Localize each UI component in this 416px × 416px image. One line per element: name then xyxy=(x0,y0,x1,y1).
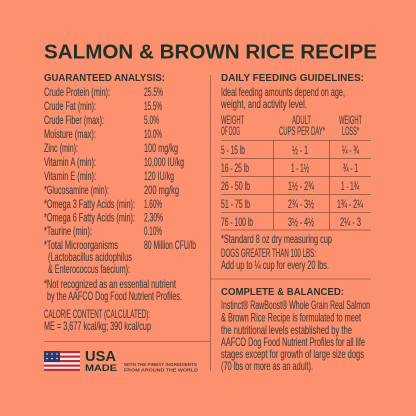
intro text xyxy=(220,86,345,111)
calorie content xyxy=(44,308,151,333)
nutrient values: 15.5% xyxy=(144,100,162,113)
nutrient labels: Zinc (min): xyxy=(44,142,78,155)
usa made badge text: FROM AROUND THE WORLD xyxy=(124,368,198,372)
large dog note xyxy=(221,247,329,272)
heading: complete and balanced: COMPLETE & BALANCED: xyxy=(221,287,344,298)
feeding table: 1 - 1½ xyxy=(291,162,309,175)
nutrient labels: Crude Fiber (max): xyxy=(44,114,104,127)
nutrient values: 100 mg/kg xyxy=(144,142,178,155)
nutrient labels: Moisture (max): xyxy=(44,128,96,141)
intro text: weight, and activity level. xyxy=(220,98,307,111)
footnote xyxy=(44,278,182,303)
nutrient labels: *Total Microorganisms xyxy=(44,239,118,252)
feeding table xyxy=(221,114,371,230)
nutrient labels: Crude Protein (min): xyxy=(44,86,110,99)
nutrient values: 1.60% xyxy=(144,198,162,211)
feeding table: 1¾ - 2¼ xyxy=(337,198,363,211)
heading: guaranteed analysis: GUARANTEED ANALYSIS: xyxy=(44,73,165,84)
nutrient values: 10.0% xyxy=(144,128,162,141)
nutrient labels: Crude Fat (min): xyxy=(44,100,96,113)
feeding table: CUPS PER DAY* xyxy=(279,125,325,138)
nutrient labels: Vitamin A (min): xyxy=(44,156,96,169)
nutrient labels: & Enterococcus faecium): xyxy=(48,263,130,276)
usa made badge text: MADE xyxy=(85,363,117,374)
feeding table: ½ - 1 xyxy=(292,144,308,157)
nutrient values: 5.0% xyxy=(144,114,159,127)
statement text xyxy=(221,299,370,373)
feeding table: ¾ - 1 xyxy=(343,162,358,175)
feeding table: 51 - 75 lb xyxy=(221,198,250,211)
large dog note: Add up to ¼ cup for every 20 lbs. xyxy=(221,259,329,272)
nutrient labels: (Lactobacillus acidophilus xyxy=(48,251,132,264)
nutrient values: 10,000 IU/kg xyxy=(144,156,184,169)
icon: usa flag xyxy=(44,351,80,371)
panel: complete and balanced xyxy=(221,287,370,373)
large dog note: DOGS GREATER THAN 100 LBS: xyxy=(221,247,316,260)
feeding table: 2¾ - 3½ xyxy=(288,198,314,211)
feeding table: 5 - 15 lb xyxy=(221,144,245,157)
nutrient values: 2.30% xyxy=(144,212,163,224)
usa made badge text: WITH THE FINEST INGREDIENTS xyxy=(124,362,197,367)
feeding table: WEIGHT xyxy=(339,114,362,127)
feeding table: 1½ - 2¾ xyxy=(288,180,314,193)
heading: daily feeding guidelines: DAILY FEEDING GUIDELINES: xyxy=(221,73,364,84)
statement text: (70 lbs or more as an adult). xyxy=(221,360,313,373)
usa made badge text xyxy=(85,349,198,374)
table footnote: *Standard 8 oz dry measuring cup xyxy=(221,233,332,246)
feeding table: OF DOG xyxy=(221,125,240,138)
title: SALMON & BROWN RICE RECIPE xyxy=(44,42,377,64)
nutrient values: 80 Million CFU/lb xyxy=(144,239,196,252)
feeding table: 3½ - 4½ xyxy=(288,216,314,229)
nutrient values: 200 mg/kg xyxy=(144,184,179,197)
feeding table: 16 - 25 lb xyxy=(221,162,249,175)
nutrient labels: *Omega 6 Fatty Acids (min): xyxy=(44,212,135,224)
panel: guaranteed analysis xyxy=(44,73,196,333)
feeding table: WEIGHT xyxy=(221,114,244,127)
footnote: *Not recognized as an essential nutrient xyxy=(44,278,176,291)
feeding table: LOSS* xyxy=(342,125,359,138)
feeding table: 1 - 1¾ xyxy=(341,180,359,193)
feeding table: ADULT xyxy=(292,114,311,127)
nutrient values: 120 IU/kg xyxy=(144,170,174,183)
intro text: Ideal feeding amounts depend on age, xyxy=(221,86,345,99)
nutrient labels: *Glucosamine (min): xyxy=(44,184,109,197)
feeding table: 26 - 50 lb xyxy=(221,180,250,193)
feeding table: 2¼ - 3 xyxy=(340,216,361,229)
nutrient labels: *Taurine (min): xyxy=(44,225,92,238)
footnote: by the AAFCO Dog Food Nutrient Profiles. xyxy=(47,290,182,303)
nutrient values: 25.5% xyxy=(144,86,163,99)
usa made badge text: USA xyxy=(85,349,117,365)
nutrient values xyxy=(144,86,196,252)
calorie content: CALORIE CONTENT (CALCULATED): xyxy=(44,308,150,321)
nutrient labels xyxy=(44,86,135,276)
feeding table: 76 - 100 lb xyxy=(221,216,253,229)
feeding table: ¼ - ¾ xyxy=(342,144,359,157)
statement text: the nutritional levels established by the xyxy=(221,324,352,337)
nutrient values: 0.10% xyxy=(144,225,162,238)
calorie content: ME = 3,677 kcal/kg; 390 kcal/cup xyxy=(44,320,151,333)
panel: daily feeding guidelines xyxy=(220,73,371,272)
nutrient labels: *Omega 3 Fatty Acids (min): xyxy=(44,198,135,211)
nutrient labels: Vitamin E (min): xyxy=(44,170,96,183)
